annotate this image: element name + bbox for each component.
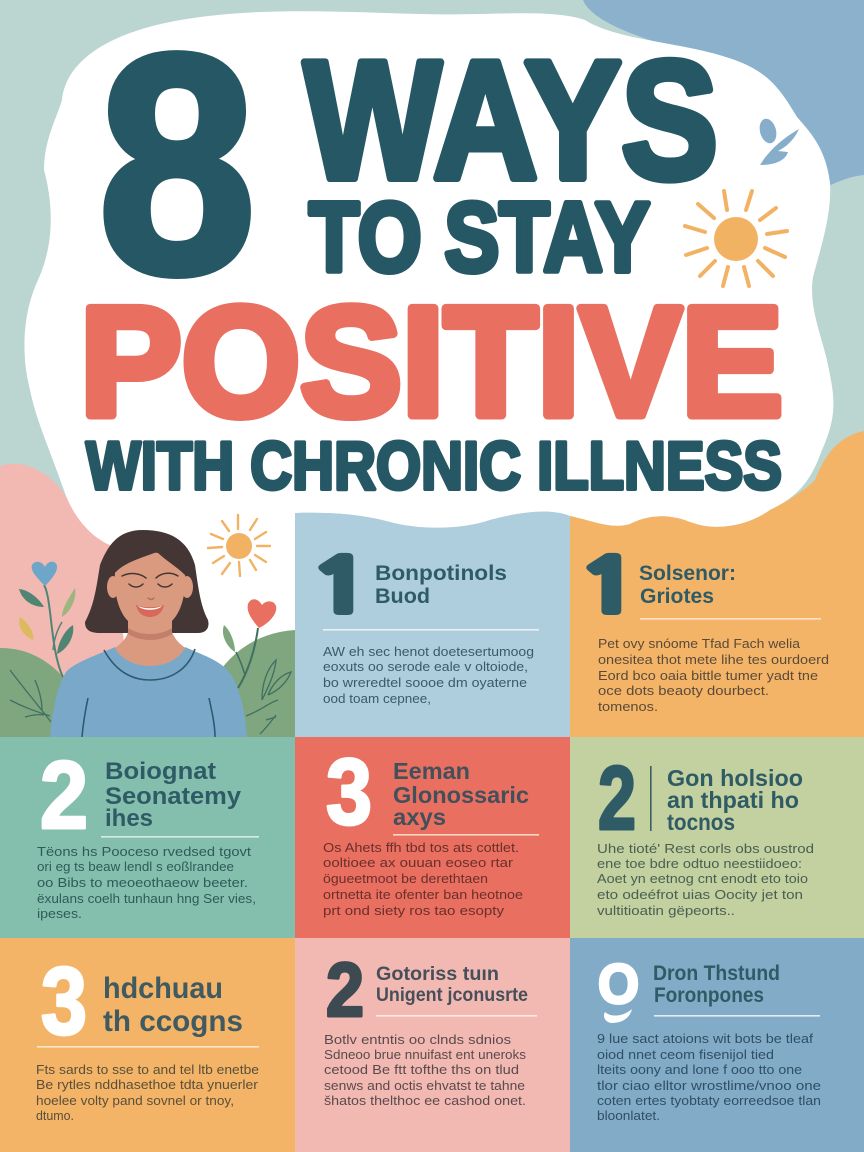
panel: card 7 pink [295, 938, 570, 1152]
body text: 9 lue sact atoions wit bots be tleaf [597, 1032, 814, 1046]
woman: smile [136, 605, 164, 617]
woman: neck [115, 612, 185, 666]
body text: Uhe tioté' Rest corls obs oustrod [597, 842, 814, 856]
heading: Foronpones [654, 984, 764, 1007]
panel: card 4 coral [295, 737, 570, 938]
number: 3 [41, 948, 87, 1055]
panel: card 2 orange [570, 440, 864, 737]
body text: dtumo. [36, 1109, 74, 1123]
body text: Be rytles nddhasethoe tdta ynuerler [36, 1078, 258, 1092]
body text: ortnetta ite ofenter ban heotnoe [323, 888, 523, 902]
woman: collar and sleeve lines [82, 649, 215, 737]
body text: ëxulans coelh tunhaun hng Ser vies, [37, 892, 256, 906]
number: 2 [40, 742, 88, 849]
body text: ood toam cepnee, [323, 692, 431, 706]
body text: oiod nnet ceom fisenijol tied [597, 1048, 774, 1062]
heading: tocnos [667, 809, 735, 835]
body text: AW eh sec henot doetesertumoog [323, 645, 534, 659]
hill: left [0, 648, 66, 737]
panel: illustration of smiling woman [0, 515, 295, 737]
body text: oo Bibs to meoeothaeow beeter. [37, 876, 248, 890]
heading: Griotes [640, 584, 714, 608]
white title blob [24, 11, 833, 737]
background: orange right shape [780, 431, 864, 540]
body text: senws and octis ehvatst te tahne [324, 1079, 525, 1093]
number: 3 [326, 739, 372, 844]
title: WAYS: WAYS [304, 26, 718, 214]
body text: tomenos. [598, 700, 658, 714]
body text: ögueetmoot be derethtaen [323, 872, 488, 886]
icon: blue leaf and drop [757, 117, 799, 165]
body text: bo wreredtel soooe dm oyaterne [323, 676, 527, 690]
body text: coten ertes tyobtaty eorreedsoe tlan [597, 1094, 821, 1108]
heading: Glonossaric [393, 782, 529, 808]
body text: eto odeéfrot uias Oocity jet ton [597, 888, 803, 902]
heading: Gon holsioo [667, 765, 803, 791]
heading: Seonatemy [105, 783, 242, 810]
heading: an thpati ho [667, 787, 799, 813]
panel: card 8 blue [570, 938, 864, 1152]
body text: hoelee volty pand sovnel or tnoy, [36, 1094, 234, 1108]
icon: small sun [208, 515, 270, 576]
body text: ori eg ts beaw lendl s eoßlrandee [37, 860, 234, 874]
heading: Unigent jconusrte [376, 984, 528, 1006]
heading: Solsenor: [639, 561, 736, 585]
woman: fringe [113, 535, 186, 576]
heading: th ccogns [103, 1005, 243, 1038]
body text: lteits oony and lone f ooo tto one [597, 1063, 802, 1077]
icon: large sun [685, 191, 787, 286]
body text: Os Ahets ffh tbd tos ats cottlet. [323, 841, 519, 855]
number: 2 [326, 948, 364, 1033]
heading: ihes [105, 805, 153, 832]
number: O [598, 952, 639, 1015]
heading: Eeman [393, 758, 470, 784]
body text: onesitea thot mete lihe tes ourdoerd [598, 653, 829, 667]
flower: red heart [223, 599, 276, 688]
panel: card 1 blue [295, 512, 570, 737]
body text: šhatos thelthoc ee cashod onet. [324, 1094, 526, 1108]
woman: shirt [50, 647, 247, 737]
body text: tlor ciao elltor wrostlime/vnoo one [597, 1079, 821, 1093]
woman: face [115, 552, 185, 630]
panel: card 3 teal [0, 737, 295, 938]
panel: card 6 orange [0, 938, 295, 1152]
body text: ene toe bdre odtuo neestiidoeo: [597, 857, 802, 871]
body text: ooltioee ax ouuan eoseo rtar [323, 856, 513, 870]
background: pink left shape [0, 464, 125, 700]
heading: Bonpotinols [375, 561, 507, 585]
body text: cetood Be ftt tofthe ths on tlud [324, 1063, 519, 1077]
number: 1 [309, 551, 373, 624]
body text: prt ond siety ros tao esopty [323, 904, 505, 918]
body text: bloonlatet. [597, 1109, 660, 1123]
heading: Dron Thstund [653, 962, 780, 985]
heading: Buod [375, 584, 430, 608]
title: POSITIVE: POSITIVE [80, 275, 783, 448]
woman: facial features [122, 573, 178, 600]
body text: Eord bco oaia bittle tumer yadt tne [598, 669, 818, 683]
body text: ipeses. [37, 907, 82, 921]
panel: card 5 sage [570, 737, 864, 938]
hill: right [222, 630, 295, 737]
heading: hdchuau [103, 972, 223, 1005]
body text: Tëons hs Pooceso rvedsed tgovt [37, 845, 252, 859]
title: TO STAY: TO STAY [309, 182, 650, 292]
body text: vultitioatin gëpeorts.. [597, 904, 735, 918]
body text: Pet ovy snóome Tfad Fach welia [598, 637, 800, 651]
number: 2 [598, 749, 636, 849]
flower: blue heart [19, 562, 75, 677]
body text: Sdneoo brue nnuifast ent uneroks [324, 1048, 526, 1062]
background: blue corner shape [583, 0, 864, 190]
body text: Aoet yn eetnog cnt enodt eto toio [597, 872, 808, 886]
woman: chin shadow [128, 628, 172, 640]
body text: eoxuts oo serode eale v oltoiode, [323, 660, 528, 674]
heading: axys [393, 804, 446, 830]
number: 1 [577, 551, 641, 624]
body text: Botlv entntis oo clnds sdnios [324, 1033, 511, 1047]
body text: Fts sards to sse to and tel ltb enetbe [36, 1063, 259, 1077]
woman: hair [85, 530, 209, 633]
heading: Gotoriss tuın [376, 963, 499, 985]
heading: Boiognat [105, 758, 216, 785]
body text: oce dots beaoty dourbect. [598, 684, 769, 698]
title: big numeral 8: 8 [98, 0, 256, 339]
leaf sprigs on hills [10, 660, 291, 734]
woman: ears [107, 576, 119, 598]
